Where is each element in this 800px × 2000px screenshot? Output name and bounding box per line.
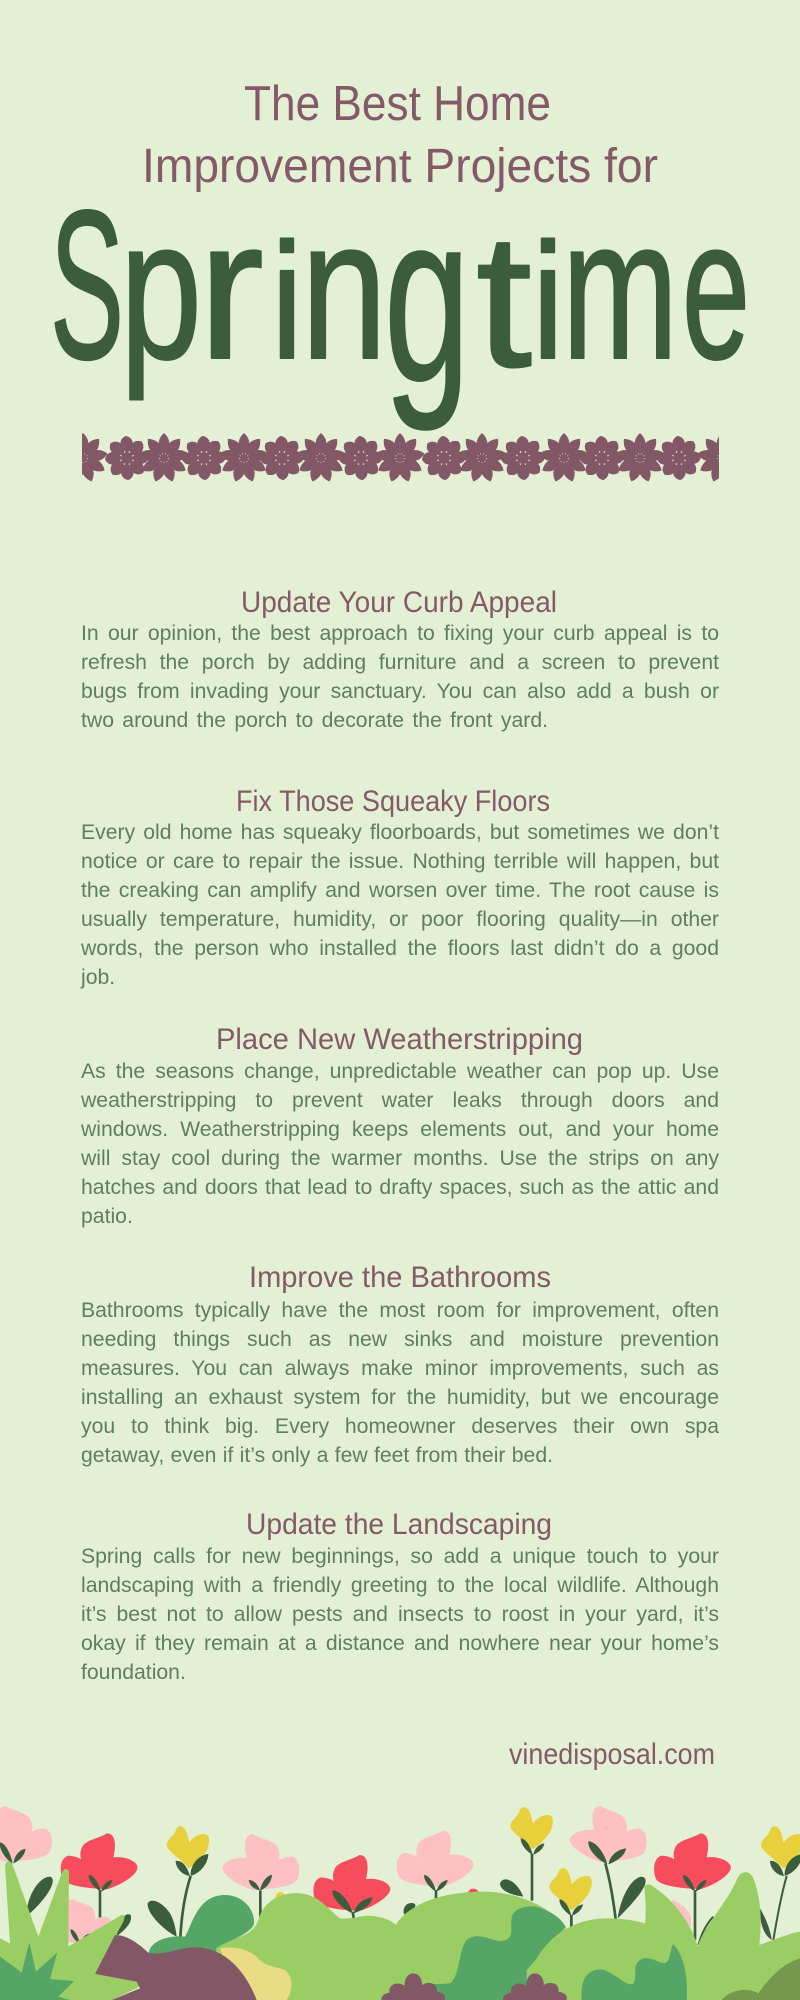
body text: will stay cool during the warmer months. Use the strips on any [81,1147,719,1170]
body text: hatches and doors that lead to drafty spaces, such as the attic and [81,1176,719,1199]
flower: yellow tulip 4 [761,1826,800,1876]
flowers behind the bushes [0,1806,800,1945]
panel: update your curb appeal [81,586,719,732]
body text: it’s best not to allow pests and insects to roost in your yard, it’s [81,1603,719,1626]
flower: yellow tulip 3 [549,1868,592,1928]
spiky plant [0,1861,140,2000]
title word: Springtime: m [562,178,678,401]
flower: pink 4 [570,1806,647,1919]
light green hill [397,1892,567,2000]
body text: refresh the porch by adding furniture and a screen to prevent [81,651,719,674]
olive hill [722,1958,800,2000]
body text [80,821,719,989]
flower: red 2 [313,1855,390,1920]
body text: windows. Weatherstripping keeps elements out, and your home [81,1118,719,1141]
title word: Springtime: e [682,178,750,401]
flower: yellow tulip 2 [510,1807,553,1901]
flower: small yellow peek [267,1892,309,1934]
heading: Fix Those Squeaky Floors [236,785,550,818]
mid green blob [581,1944,687,2000]
body text: okay if they remain at a distance and nowhere near your home’s [81,1632,719,1655]
body text: usually temperature, humidity, or poor flooring quality—in other [81,908,719,931]
flower: pink top left [0,1806,52,1864]
body text: two around the porch to decorate the front yard. [81,709,548,732]
flower: small pink [46,1899,112,1944]
flower: red 3 [654,1833,731,1940]
title line 1: The Best Home [244,77,551,131]
dark leaves behind [404,1879,523,1914]
body text: As the seasons change, unpredictable weather can pop up. Use [81,1060,719,1083]
body text: In our opinion, the best approach to fixing your curb appeal is to [81,622,719,645]
heading: Improve the Bathrooms [249,1261,551,1294]
star plant [0,1942,74,2000]
body text [81,1060,719,1228]
body text: you to think big. Every homeowner deserves their own spa [81,1415,719,1438]
flower: pink 3 [397,1831,474,1898]
dark leaf [618,1877,646,1918]
title line 2: Improvement Projects for [142,140,658,193]
title word: Springtime: p [120,178,202,401]
flower: pink 2 [222,1834,299,1917]
body text: bugs from invading your sanctuary. You can also add a bush or [81,680,719,703]
mauve flower 1 [381,1973,446,2000]
pale yellow bush [220,1947,291,2000]
title word: Springtime: S [50,166,124,403]
body text: Bathrooms typically have the most room for improvement, often [81,1299,719,1322]
flower: pink peek [672,1899,691,1930]
dark leaf [148,1901,177,1937]
flower: yellow tulip 1 [167,1826,209,1937]
body text: the creaking can amplify and worsen over time. The root cause is [81,879,719,902]
mid green bush [149,1895,254,1967]
body text: patio. [81,1205,133,1228]
heading: Update Your Curb Appeal [241,586,557,619]
title word: Springtime: n [301,178,387,401]
body text: notice or care to repair the issue. Nothing terrible will happen, but [81,850,719,873]
heading: Place New Weatherstripping [216,1023,583,1056]
panel: fix those squeaky floors [80,785,719,989]
website url: vinedisposal.com [509,1738,715,1771]
light green bush left [216,1893,400,2000]
body text: needing things such as new sinks and moisture prevention [81,1328,719,1351]
dark stem and leaf [698,1876,787,1945]
title word: Springtime: t [476,195,532,407]
body text [81,1545,719,1684]
title word: Springtime: i [271,209,303,393]
title word: Springtime: r [198,178,264,401]
body text: installing an exhaust system for the humidity, but we encourage [81,1386,719,1409]
body text: weatherstripping to prevent water leaks through doors and [81,1089,719,1112]
body text: measures. You can always make minor improvements, such as [81,1357,719,1380]
title word: Springtime: g [384,163,470,431]
dark leaf [117,1914,131,1935]
body text: Every old home has squeaky floorboards, but sometimes we don’t [81,821,719,844]
light green leafy hill [526,1872,800,2000]
body text: getaway, even if it’s only a few feet from their bed. [81,1444,553,1467]
panel: improve the bathrooms [81,1261,720,1467]
body text: words, the person who installed the floors last didn’t do a good [81,937,719,960]
dark leaf [27,1877,53,1913]
mauve hill [95,1935,257,2000]
mauve flower 2 [503,1973,568,2000]
heading: Update the Landscaping [246,1508,552,1541]
body text [81,622,719,732]
flower: red 1 [61,1833,138,1928]
body text: Spring calls for new beginnings, so add a unique touch to your [81,1545,719,1568]
body text: foundation. [81,1661,186,1684]
right bushes [381,1872,800,2000]
body text: landscaping with a friendly greeting to the local wildlife. Although [81,1574,719,1597]
body text [81,1299,720,1467]
title word: Springtime: i [532,209,564,393]
panel: place new weatherstripping [81,1023,719,1228]
title [50,77,750,431]
flower: small red peek [468,1889,479,1899]
flower border strip [82,433,719,482]
mid green blob [420,1906,566,2000]
body text: job. [81,966,115,989]
garden illustration [0,1806,800,2000]
